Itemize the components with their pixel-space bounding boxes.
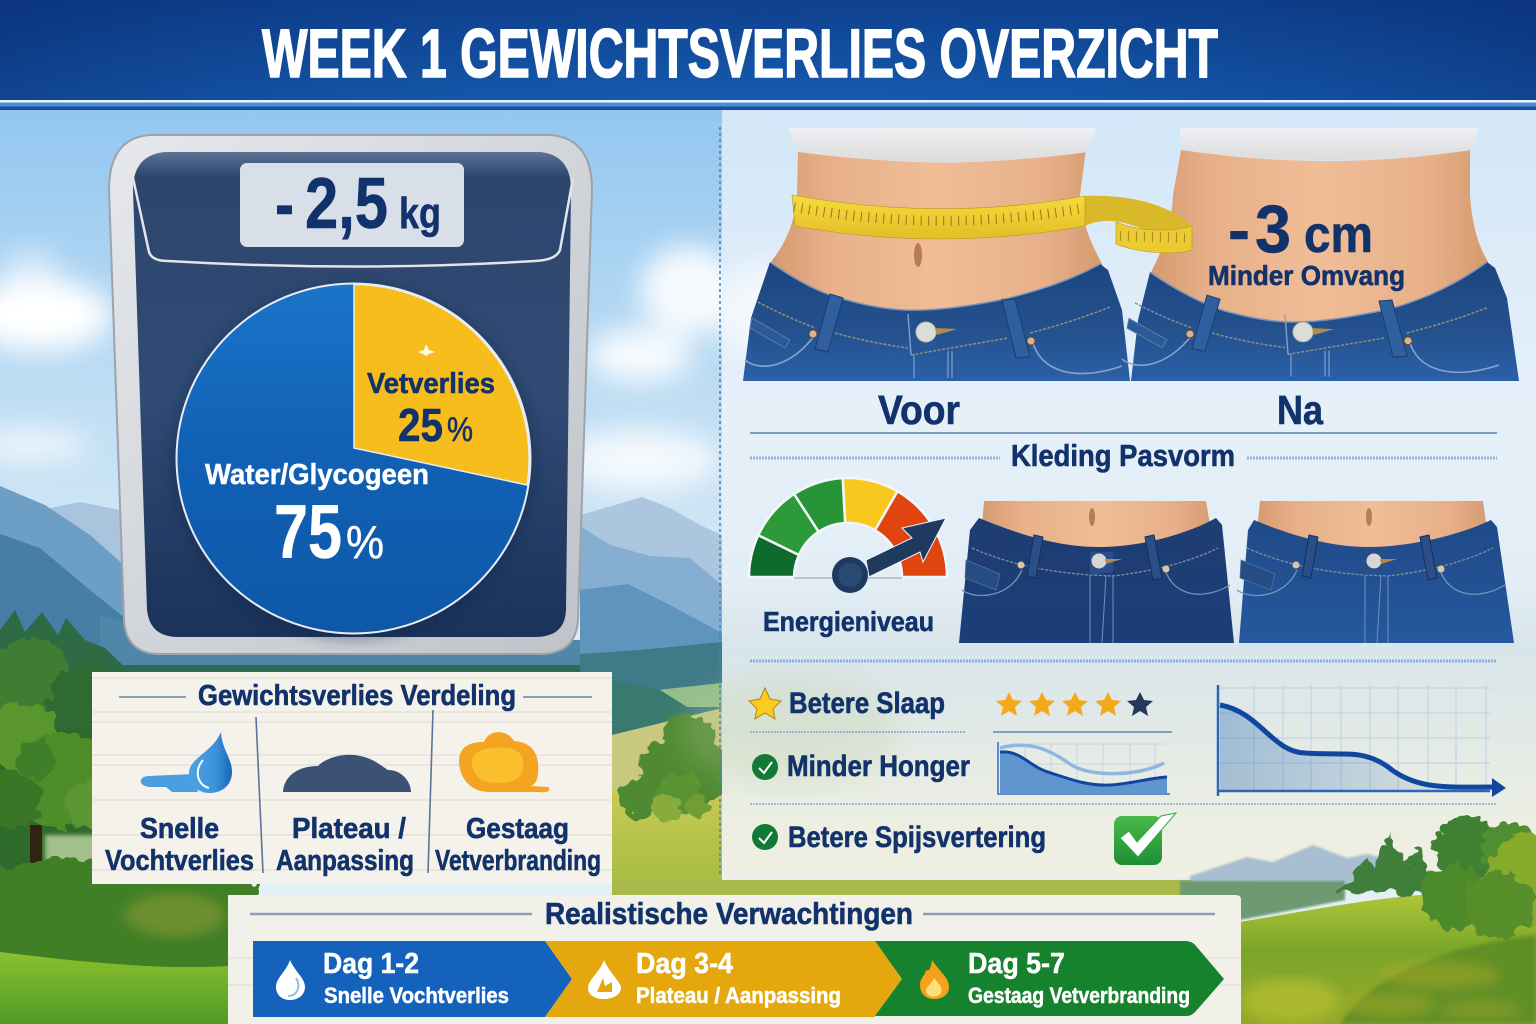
- photo: voor torso with jeans: [743, 128, 1130, 381]
- right content panel backdrop: [680, 110, 1536, 920]
- callout: -3 cm minder omvang: -: [1228, 194, 1250, 266]
- row: betere slaap: Betere Slaap: [789, 687, 945, 720]
- weight readout: 2,5: [305, 164, 388, 244]
- photo: na torso with jeans: [1122, 128, 1519, 381]
- label: water/glycogeen: %: [346, 516, 384, 568]
- weight readout: [240, 163, 464, 247]
- energy gauge: [749, 478, 947, 593]
- clouds: [0, 246, 740, 490]
- label: snelle vochtverlies: [105, 813, 254, 877]
- photo: jeans pasvorm na: [1237, 501, 1514, 643]
- left grass: [0, 952, 228, 1024]
- gauge needle: [832, 518, 946, 593]
- heading: Realistische Verwachtingen: [545, 896, 913, 931]
- label: voor: Voor: [878, 387, 960, 433]
- label: water/glycogeen: 75: [274, 490, 342, 575]
- callout: -3 cm minder omvang: [1208, 191, 1405, 291]
- pie chart: [172, 282, 536, 640]
- timeline step: dag 1-2: Snelle Vochtverlies: [324, 983, 509, 1008]
- right mountains: [580, 497, 722, 735]
- header band: [0, 0, 1536, 110]
- label: vetverlies: 25: [398, 399, 443, 451]
- icon: orange flame blob: [459, 732, 549, 792]
- weighing scale: [109, 135, 592, 654]
- label: energieniveau: Energieniveau: [763, 606, 934, 637]
- icon: water drop: [141, 732, 232, 793]
- small area chart: [998, 742, 1170, 794]
- label: snelle vochtverlies: Snelle: [140, 813, 219, 845]
- left mountains: [0, 486, 610, 690]
- timeline step: dag 3-4: Dag 3-4: [636, 948, 733, 980]
- label: plateau aanpassing: [276, 813, 414, 877]
- scale face: [133, 152, 571, 637]
- label: water/glycogeen: [205, 459, 429, 575]
- timeline step: dag 3-4: Plateau / Aanpassing: [636, 983, 841, 1008]
- measuring tape: [792, 195, 1192, 253]
- label: gestaag vetverbranding: Vetverbranding: [435, 845, 601, 877]
- row: minder honger: Minder Honger: [787, 750, 970, 783]
- callout: -3 cm minder omvang: cm: [1304, 206, 1373, 264]
- timeline step: dag 5-7: Gestaag Vetverbranding: [968, 983, 1190, 1008]
- panel: gewichtsverlies verdeling: [92, 672, 612, 884]
- trees bottom right: [1240, 816, 1536, 1024]
- right field and trees: [612, 708, 1252, 900]
- label: snelle vochtverlies: Vochtverlies: [105, 845, 254, 877]
- timeline step: dag 3-4: [545, 941, 902, 1017]
- photo: jeans pasvorm voor: [959, 501, 1234, 643]
- weight readout: -: [275, 165, 294, 243]
- label: plateau aanpassing: Aanpassing: [276, 845, 414, 877]
- left forest: [0, 610, 260, 985]
- timeline step: dag 1-2: [253, 941, 572, 1017]
- label: gestaag vetverbranding: [435, 813, 601, 877]
- row: betere spijsvertering: Betere Spijsvertering: [788, 821, 1046, 854]
- icon: green check tile: [1114, 813, 1176, 865]
- rating stars: [996, 692, 1153, 716]
- callout: -3 cm minder omvang: Minder Omvang: [1208, 260, 1405, 291]
- timeline step: dag 5-7: Dag 5-7: [968, 948, 1065, 980]
- weight readout: kg: [399, 189, 441, 238]
- label: plateau aanpassing: Plateau /: [292, 813, 406, 845]
- timeline step: dag 5-7: [875, 941, 1224, 1016]
- label: gestaag vetverbranding: Gestaag: [466, 813, 569, 845]
- callout: -3 cm minder omvang: 3: [1255, 191, 1291, 267]
- label: vetverlies: Vetverlies: [367, 368, 495, 400]
- timeline step: dag 1-2: Dag 1-2: [323, 948, 419, 980]
- label: water/glycogeen: Water/Glycogeen: [205, 459, 429, 491]
- label: na: Na: [1277, 387, 1324, 433]
- label: vetverlies: %: [447, 411, 473, 449]
- big trend chart: [1218, 685, 1506, 797]
- panel: realistische verwachtingen: [228, 895, 1241, 1024]
- heading: kleding pasvorm: Kleding Pasvorm: [1011, 438, 1235, 473]
- right meadow: [1240, 890, 1536, 1024]
- label: vetverlies: [367, 368, 495, 451]
- heading: Gewichtsverlies Verdeling: [198, 680, 516, 712]
- icon: plateau hill: [283, 755, 411, 792]
